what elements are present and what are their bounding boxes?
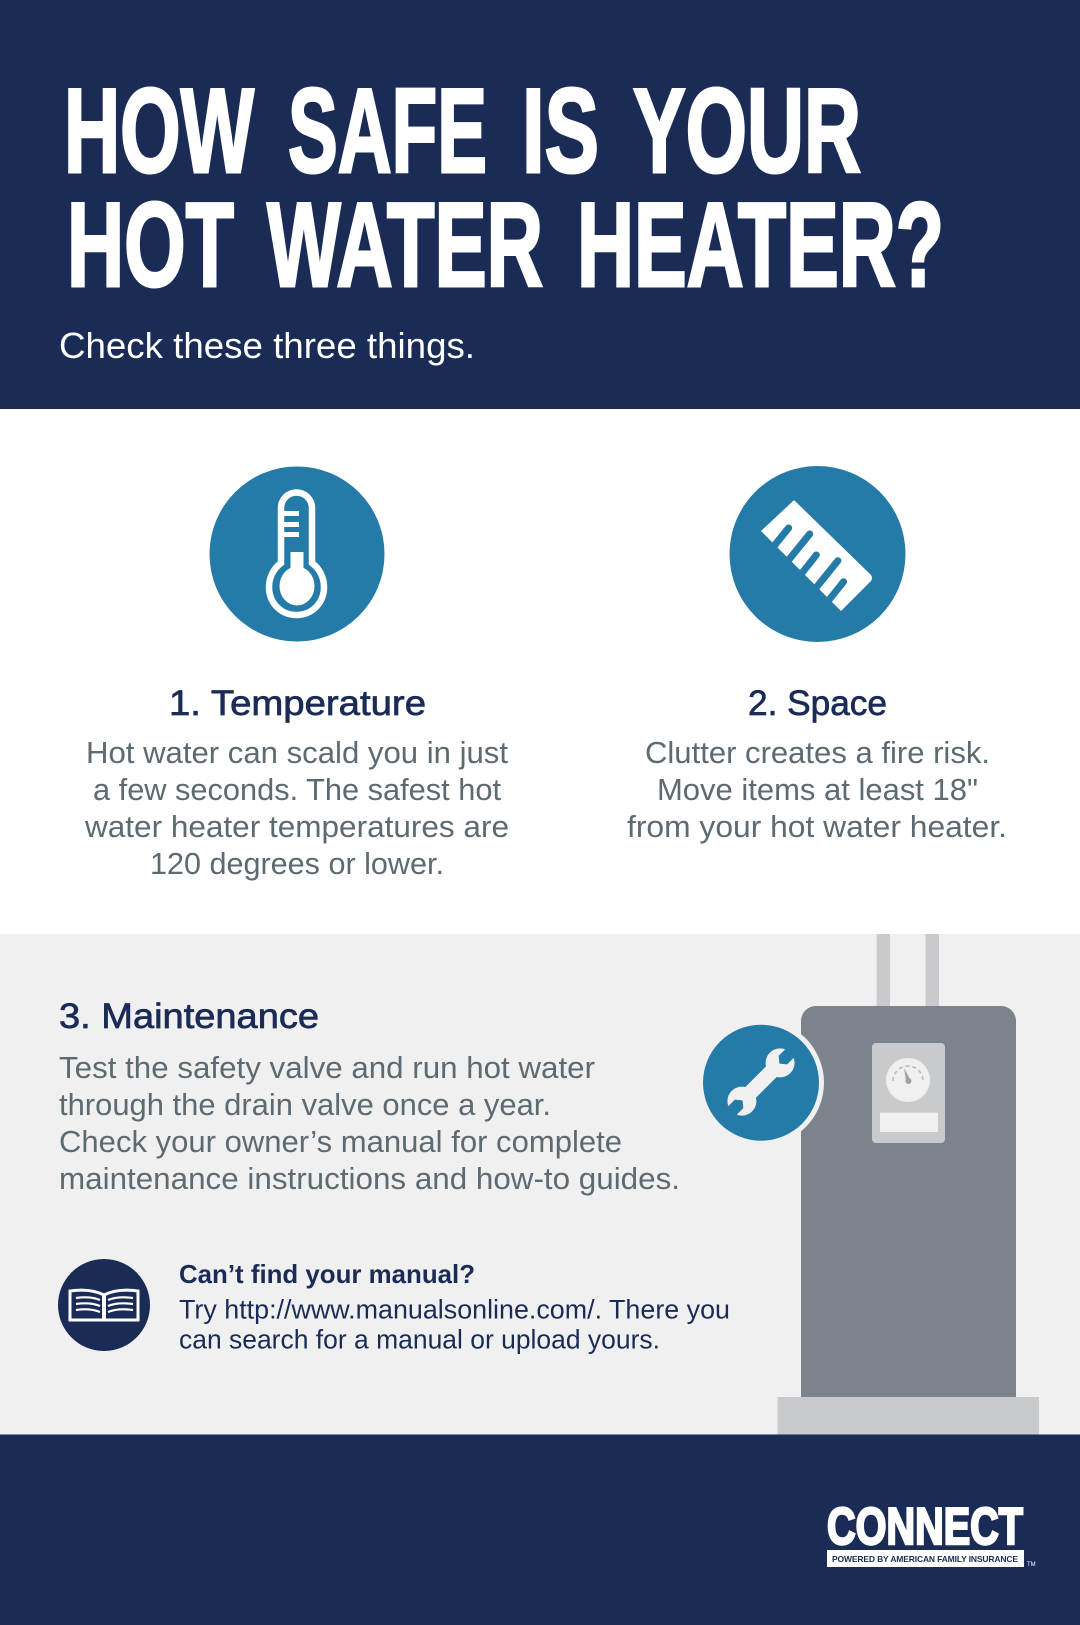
heading: space: 2. Space (748, 684, 887, 723)
text block: maintenance: Check your owner’s manual for complete (59, 1125, 622, 1159)
panel: temperature (84, 466, 509, 881)
icon: wrench (698, 1020, 824, 1146)
text block: temperature: water heater temperatures are (84, 810, 509, 844)
text block: temperature: 120 degrees or lower. (150, 847, 444, 881)
text block: maintenance: Test the safety valve and run hot water (59, 1051, 595, 1085)
callout: manual (179, 1259, 730, 1354)
icon: ruler (730, 466, 906, 642)
callout: manual: can search for a manual or upload yours. (179, 1324, 660, 1354)
logo: connect: TM (1027, 1562, 1036, 1568)
text block: space (627, 736, 1007, 844)
heading: temperature: 1. Temperature (169, 684, 426, 723)
illustration: water heater (778, 934, 1039, 1434)
panel: header (0, 0, 1080, 409)
text block: space: Clutter creates a fire risk. (645, 736, 990, 770)
text block: maintenance: maintenance instructions and how-to guides. (59, 1162, 680, 1196)
callout: manual: Can’t find your manual? (179, 1259, 475, 1289)
text block: maintenance: through the drain valve once a year. (59, 1088, 551, 1122)
text block: maintenance (59, 1051, 680, 1196)
icon: thermometer (210, 466, 384, 642)
subtitle: Check these three things. (59, 325, 475, 366)
text block: temperature (84, 736, 509, 881)
heading: maintenance: 3. Maintenance (59, 997, 319, 1036)
title: IS (522, 64, 599, 198)
title: SAFE (288, 64, 487, 198)
title: HOT (67, 178, 234, 312)
logo: connect: CONNECT (827, 1498, 1023, 1556)
text block: space: from your hot water heater. (627, 810, 1007, 844)
logo: connect: POWERED BY AMERICAN FAMILY INSURANCE (832, 1554, 1018, 1564)
title: HOW (64, 64, 254, 198)
panel: space (627, 466, 1007, 844)
icon: open book (58, 1259, 150, 1351)
text block: temperature: a few seconds. The safest hot (93, 773, 502, 807)
title: YOUR (633, 64, 861, 198)
callout: manual: Try http://www.manualsonline.com/. There you (179, 1294, 730, 1324)
title (64, 64, 944, 312)
panel: footer (0, 1434, 1080, 1625)
text block: space: Move items at least 18" (657, 773, 978, 807)
title: WATER (267, 178, 543, 312)
panel: maintenance (0, 934, 1080, 1434)
text block: temperature: Hot water can scald you in just (86, 736, 509, 770)
